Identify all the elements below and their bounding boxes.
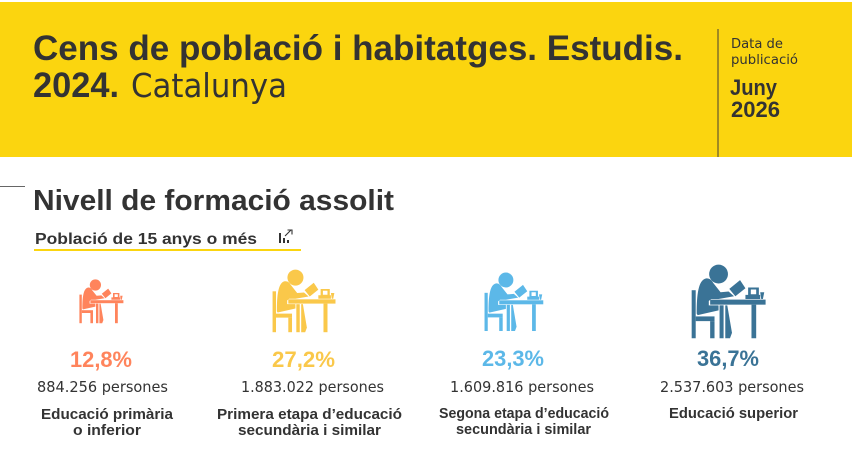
category label (217, 406, 402, 439)
publication date: Data de (731, 37, 783, 52)
category label (41, 406, 174, 439)
title: Cens de població i habitatges. Estudis. (33, 29, 683, 68)
title (33, 29, 683, 105)
people count: 884.256 persones (37, 378, 168, 396)
column: second stage secondary (439, 273, 609, 438)
people count: 2.537.603 persones (660, 378, 804, 396)
icon: person studying, yellow (273, 270, 335, 332)
category label (439, 405, 609, 438)
title: Catalunya (131, 66, 287, 105)
category label: o inferior (73, 422, 141, 439)
icon: person studying, light blue (485, 273, 543, 331)
people count: 1.883.022 persones (241, 378, 384, 396)
icon: person studying, orange (79, 279, 123, 323)
percentage: 23,3% (482, 346, 544, 371)
category label: secundària i similar (456, 421, 591, 438)
header band (0, 2, 852, 157)
column: primary education (37, 279, 174, 439)
percentage: 36,7% (697, 346, 759, 371)
publication date (730, 37, 798, 122)
percentage: 27,2% (272, 347, 335, 372)
column: first stage secondary (217, 270, 402, 439)
category label: Educació superior (669, 405, 798, 422)
icon: chart expand (279, 230, 292, 243)
publication date: 2026 (731, 97, 780, 122)
category label: secundària i similar (238, 422, 381, 439)
title: 2024. (33, 66, 119, 105)
publication date: publicació (731, 53, 798, 68)
publication date: Juny (730, 75, 778, 100)
people count: 1.609.816 persones (450, 378, 594, 396)
subheading: Població de 15 anys o més (35, 231, 257, 248)
category label: Primera etapa d’educació (217, 406, 402, 423)
category label: Educació primària (41, 406, 174, 423)
column: higher education (660, 265, 804, 422)
percentage: 12,8% (70, 347, 132, 372)
category label: Segona etapa d’educació (439, 405, 609, 422)
icon: person studying, dark blue (692, 265, 766, 338)
section heading: Nivell de formació assolit (33, 185, 394, 217)
